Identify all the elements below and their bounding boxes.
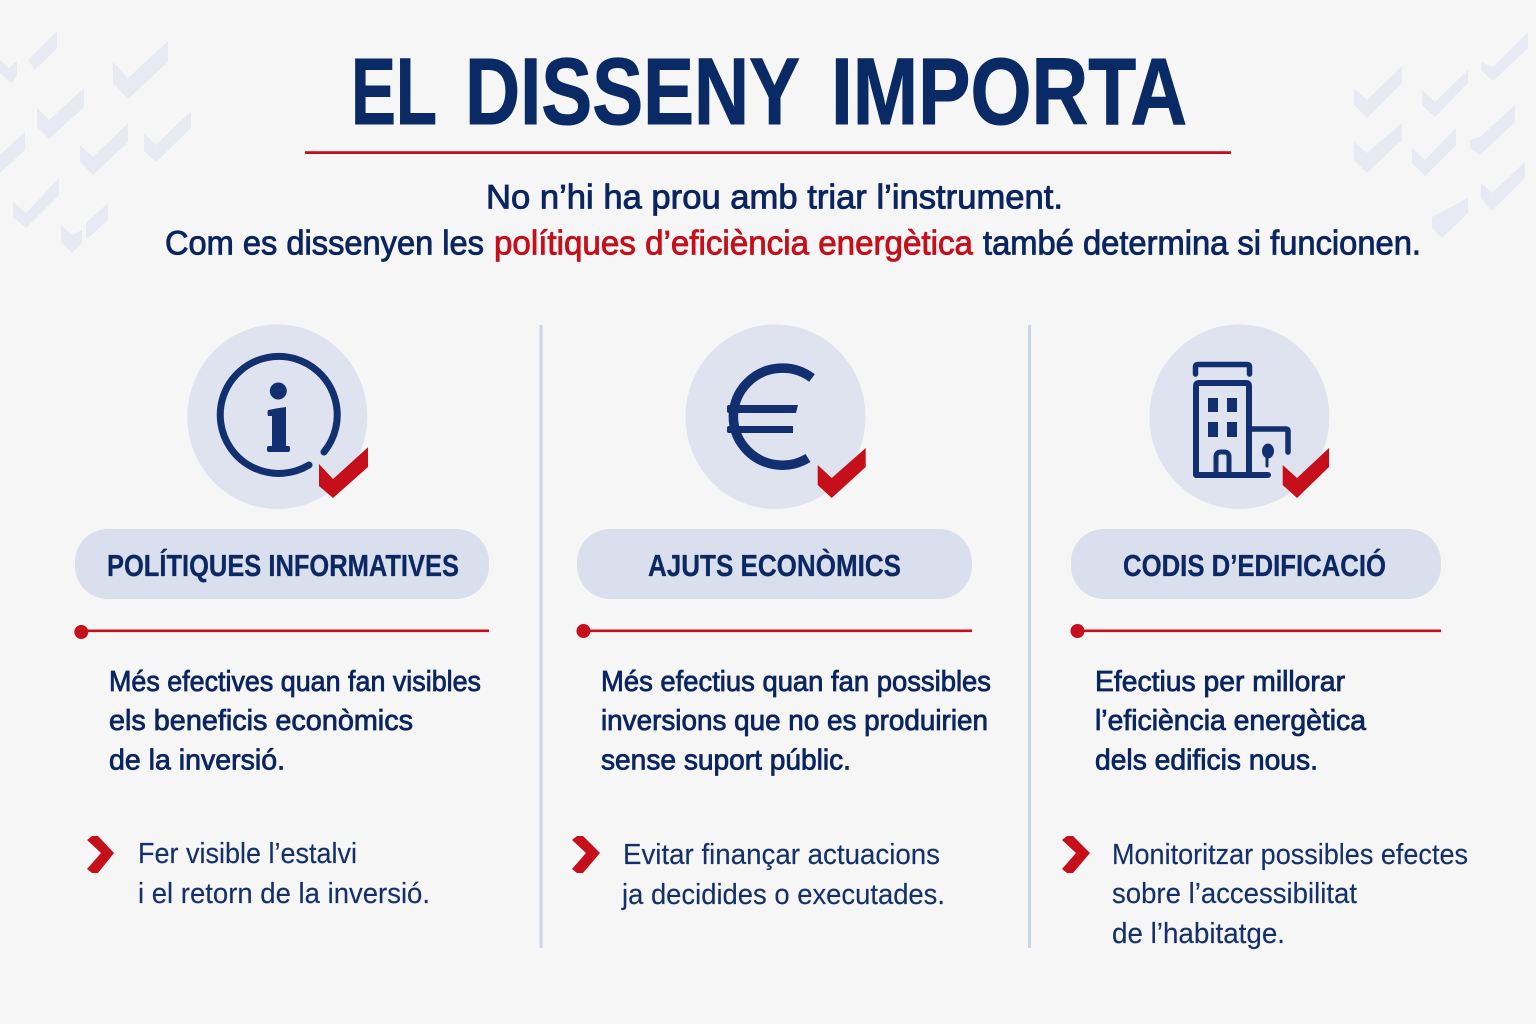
subtitle [165, 178, 1421, 262]
description [109, 666, 481, 776]
description: l’eficiència energètica [1095, 705, 1367, 737]
recommendation: sobre l’accessibilitat [1112, 878, 1357, 910]
heading pill [75, 529, 489, 599]
chevron [572, 836, 600, 873]
description [1095, 666, 1367, 776]
description: sense suport públic. [601, 744, 851, 776]
subtitle: Com es dissenyen les [165, 224, 484, 262]
description [601, 666, 991, 776]
description: de la inversió. [109, 744, 285, 776]
heading pill [577, 529, 972, 599]
description: Més efectius quan fan possibles [601, 666, 991, 698]
recommendation [621, 839, 945, 911]
recommendation: de l’habitatge. [1112, 918, 1285, 950]
heading pill: AJUTS ECONÒMICS [648, 547, 901, 583]
recommendation: Evitar finançar actuacions [623, 839, 940, 871]
subtitle: polítiques d’eficiència energètica [494, 224, 973, 262]
red rule with dot [1070, 624, 1441, 638]
description: Més efectives quan fan visibles [109, 666, 481, 698]
title: EL [351, 39, 437, 145]
description: dels edificis nous. [1095, 744, 1318, 776]
background checkmarks: right [1354, 32, 1528, 238]
panel: polítiques informatives [74, 324, 489, 910]
panel: ajuts econòmics [572, 324, 991, 911]
title: IMPORTA [831, 39, 1187, 145]
recommendation: Monitoritzar possibles efectes [1112, 839, 1468, 871]
title underline [305, 151, 1231, 154]
red rule with dot [74, 625, 489, 639]
description: inversions que no es produirien [601, 705, 988, 737]
title: DISSENY [465, 39, 800, 145]
description: els beneficis econòmics [109, 705, 413, 737]
recommendation [138, 838, 430, 910]
heading pill: CODIS D’EDIFICACIÓ [1123, 547, 1386, 583]
column divider 1 [540, 325, 542, 948]
icon: building with check [1149, 324, 1329, 509]
recommendation: ja decidides o executades. [621, 879, 945, 911]
icon: euro with check [686, 324, 866, 509]
heading pill: POLÍTIQUES INFORMATIVES [107, 548, 459, 583]
background checkmarks: left [0, 31, 191, 253]
red rule with dot [576, 624, 972, 638]
description: Efectius per millorar [1095, 666, 1345, 698]
panel: codis d'edificació [1062, 324, 1468, 950]
heading pill [1071, 529, 1441, 599]
column divider 2 [1028, 325, 1031, 948]
subtitle: No n’hi ha prou amb triar l’instrument. [486, 178, 1063, 216]
recommendation [1112, 839, 1468, 950]
recommendation: i el retorn de la inversió. [138, 878, 430, 910]
chevron [87, 836, 114, 873]
chevron [1062, 836, 1090, 873]
icon: information with check [187, 324, 368, 509]
recommendation: Fer visible l’estalvi [138, 838, 357, 870]
title [351, 39, 1187, 145]
subtitle: també determina si funcionen. [983, 224, 1421, 262]
